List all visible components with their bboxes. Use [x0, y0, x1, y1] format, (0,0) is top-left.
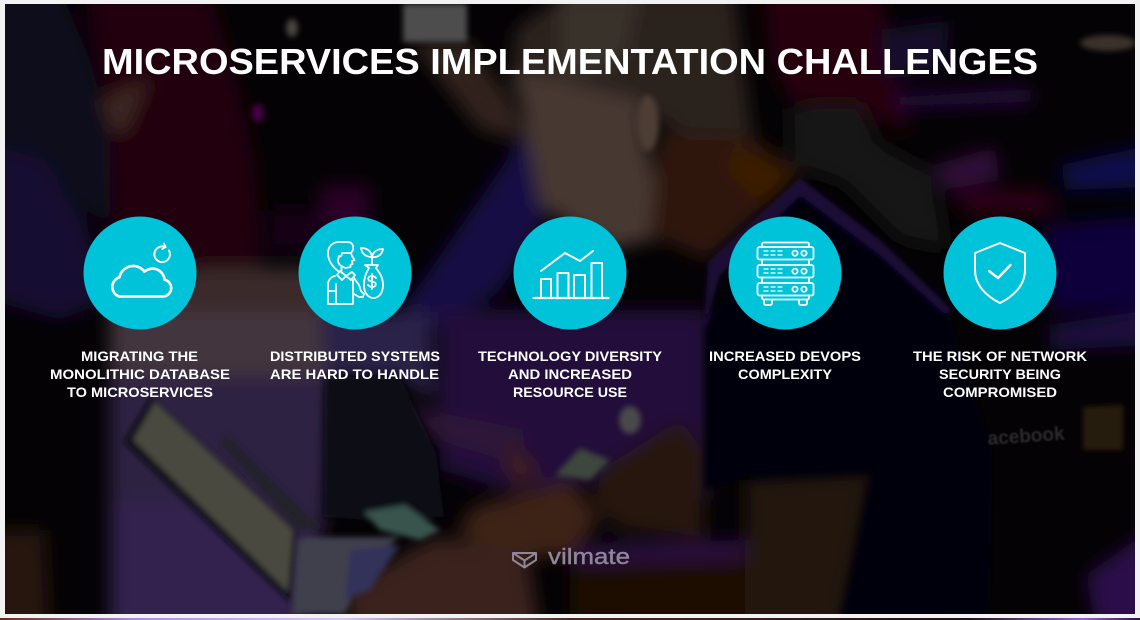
column: technology diversity — [478, 216, 663, 400]
faint background sign text: acebook — [987, 424, 1066, 450]
title: MICROSERVICES IMPLEMENTATION CHALLENGES — [102, 41, 1038, 82]
icon circle: person with money bag and plant — [298, 216, 412, 330]
icon circle: bar chart with trend line — [514, 216, 626, 330]
label: MIGRATING THE — [81, 348, 198, 364]
label: COMPLEXITY — [738, 366, 833, 382]
column: increased devops complexity — [709, 216, 861, 382]
label: RESOURCE USE — [513, 384, 627, 400]
column: distributed systems — [270, 216, 440, 382]
label — [913, 348, 1087, 400]
bottom strip of underlying image — [0, 618, 1140, 620]
icon: vilmate envelope mark — [513, 553, 536, 568]
column: network security risk — [913, 216, 1087, 400]
vilmate logo — [513, 544, 630, 569]
label — [709, 348, 861, 382]
label: INCREASED DEVOPS — [709, 348, 861, 364]
label — [478, 348, 663, 400]
icon circle: cloud with refresh — [84, 216, 196, 330]
label: THE RISK OF NETWORK — [913, 348, 1087, 364]
label — [50, 348, 230, 400]
icon circle: shield with check — [944, 216, 1056, 330]
label: ARE HARD TO HANDLE — [270, 366, 439, 382]
laptop screen — [124, 397, 296, 603]
label: SECURITY BEING — [939, 366, 1061, 382]
label: TO MICROSERVICES — [67, 384, 213, 400]
label: MONOLITHIC DATABASE — [50, 366, 230, 382]
column: migrating the monolithic database — [50, 216, 230, 400]
label — [270, 348, 440, 382]
label: DISTRIBUTED SYSTEMS — [270, 348, 440, 364]
icon circle: server rack — [728, 216, 842, 330]
label: AND INCREASED — [508, 366, 632, 382]
label: COMPROMISED — [943, 384, 1057, 400]
label: TECHNOLOGY DIVERSITY — [478, 348, 663, 364]
wordmark: vilmate — [548, 544, 630, 569]
